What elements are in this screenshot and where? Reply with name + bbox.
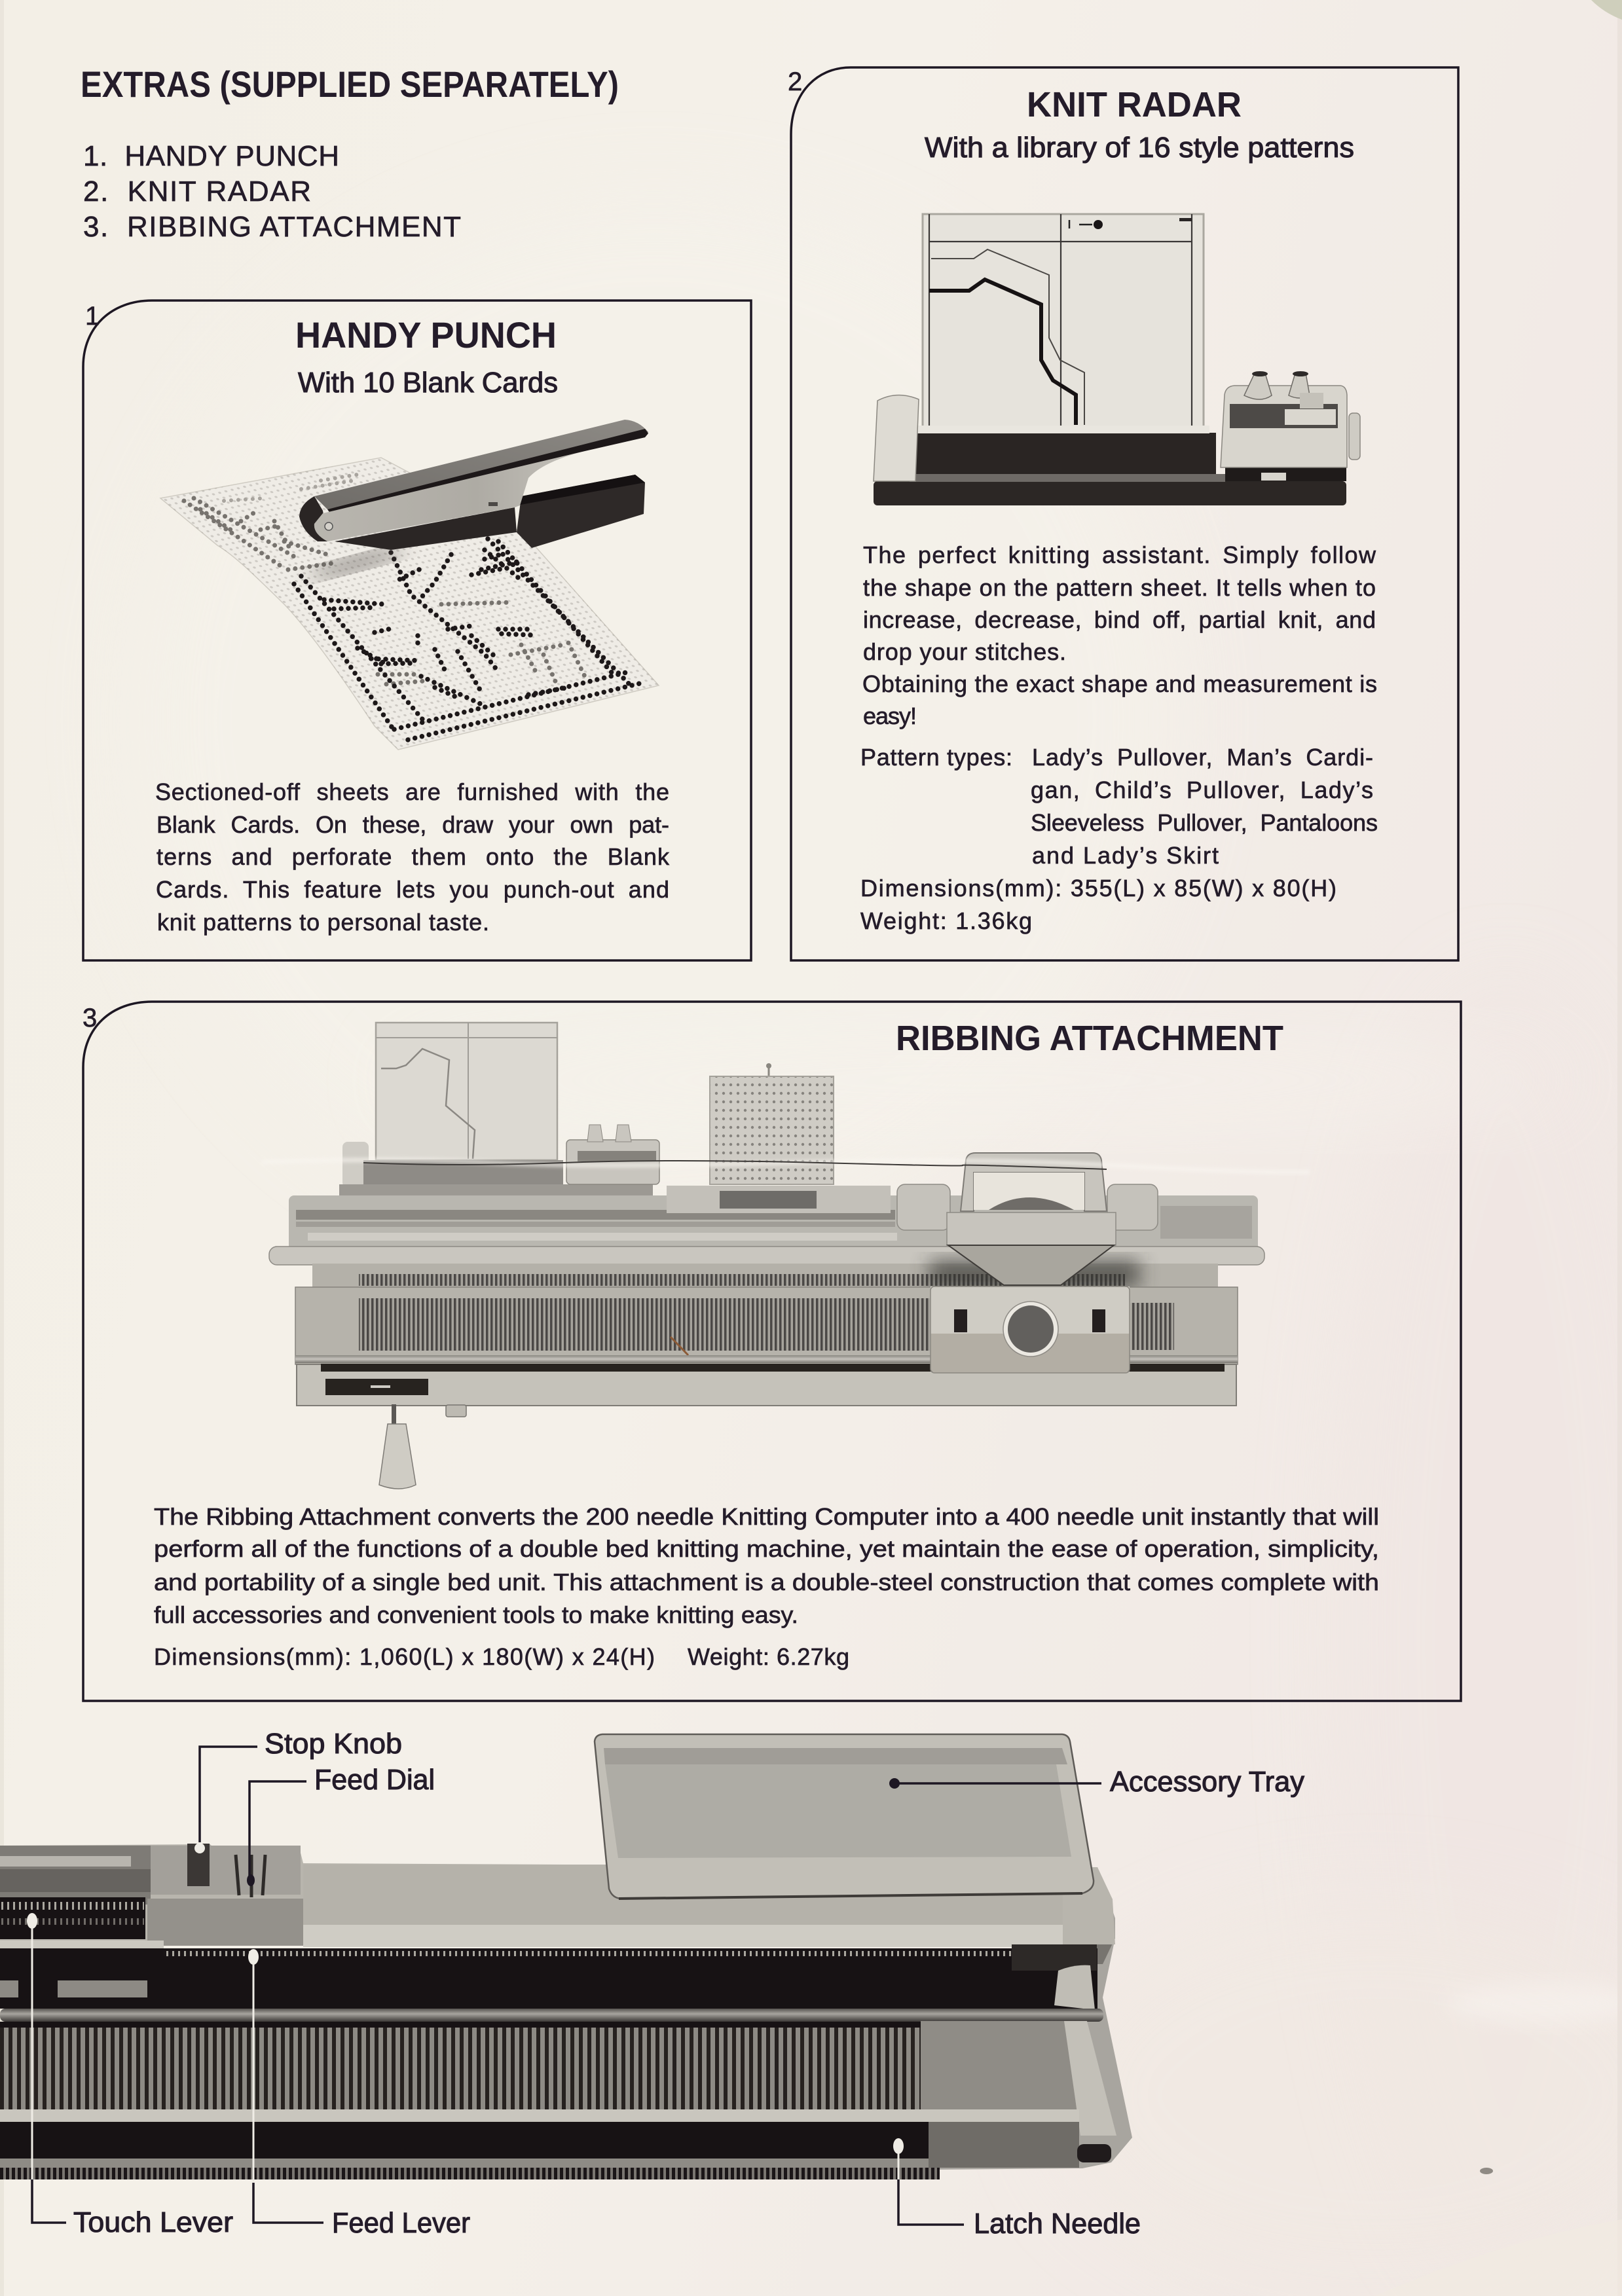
heading: knit radar: KNIT RADAR xyxy=(1027,85,1242,124)
description text: perform all of the functions of a double bed knitting machine, yet maintain the ease of operation, simplicity, xyxy=(154,1535,1379,1562)
illustration: punched card and hand punch xyxy=(151,420,668,759)
panel number 2: 2 xyxy=(788,67,802,96)
callout: latch needle: Latch Needle xyxy=(974,2208,1141,2240)
description text xyxy=(862,541,1377,729)
callout: accessory tray: Accessory Tray xyxy=(1110,1766,1304,1798)
description text: and portability of a single bed unit. This attachment is a double-steel construction that comes complete with xyxy=(154,1569,1379,1595)
pattern types: gan, Child’s Pullover, Lady’s xyxy=(1031,776,1373,803)
panel: ribbing attachment xyxy=(83,1002,1461,1701)
pattern types: Lady’s Pullover, Man’s Cardi- xyxy=(1032,744,1373,771)
specifications: Weight: 6.27kg xyxy=(688,1643,849,1670)
callout: accessory tray xyxy=(889,1766,1304,1798)
pattern types: and Lady’s Skirt xyxy=(1032,842,1219,869)
callout: feed lever: Feed Lever xyxy=(332,2207,470,2239)
callout: touch lever xyxy=(27,1913,233,2238)
pattern types: Sleeveless Pullover, Pantaloons xyxy=(1031,809,1378,836)
contents list xyxy=(83,140,461,243)
description text: The perfect knitting assistant. Simply follow xyxy=(863,541,1376,568)
callout: feed lever xyxy=(248,1949,470,2239)
description text: drop your stitches. xyxy=(863,638,1066,665)
contents list: 1. HANDY PUNCH xyxy=(83,140,339,172)
illustration: knitting machine close-up xyxy=(0,1734,1132,2179)
callout: feed dial: Feed Dial xyxy=(314,1764,435,1796)
subheading: style library: With a library of 16 style patterns xyxy=(925,132,1354,164)
panel number 3: 3 xyxy=(83,1004,97,1032)
body text: terns and perforate them onto the Blank xyxy=(157,843,670,870)
heading: ribbing attachment: RIBBING ATTACHMENT xyxy=(896,1019,1283,1058)
description text: full accessories and convenient tools to make knitting easy. xyxy=(154,1601,798,1628)
subheading: blank cards: With 10 Blank Cards xyxy=(298,367,558,399)
panel: knit radar xyxy=(788,67,1458,960)
specifications: Weight: 1.36kg xyxy=(860,907,1032,934)
body text: Cards. This feature lets you punch-out and xyxy=(156,876,669,903)
specifications: Dimensions(mm): 1,060(L) x 180(W) x 24(H) xyxy=(154,1643,655,1670)
callout: stop knob xyxy=(194,1728,402,1853)
illustration: knit radar device xyxy=(874,214,1360,505)
description text xyxy=(154,1503,1379,1628)
specifications: Dimensions(mm): 355(L) x 85(W) x 80(H) xyxy=(860,875,1336,902)
contents list: 2. KNIT RADAR xyxy=(83,175,311,208)
body text xyxy=(155,778,670,936)
description text: increase, decrease, bind off, partial knit, and xyxy=(863,606,1376,633)
description text: the shape on the pattern sheet. It tells when to xyxy=(863,574,1376,601)
pattern types: Pattern types: xyxy=(860,744,1012,771)
callout: feed dial xyxy=(247,1764,435,1886)
description text: Obtaining the exact shape and measurement is xyxy=(862,670,1377,697)
pattern types xyxy=(860,744,1378,869)
heading: handy punch: HANDY PUNCH xyxy=(295,314,557,355)
body text: knit patterns to personal taste. xyxy=(157,909,489,936)
illustration: knitting machine with ribber xyxy=(269,1023,1264,1489)
panel number 1: 1 xyxy=(85,302,100,331)
callout: touch lever: Touch Lever xyxy=(73,2206,233,2238)
callout: stop knob: Stop Knob xyxy=(265,1728,402,1760)
description text: The Ribbing Attachment converts the 200 needle Knitting Computer into a 400 needle unit instantly that will xyxy=(154,1503,1379,1530)
specifications xyxy=(860,875,1336,934)
description text: easy! xyxy=(863,702,917,729)
contents list: 3. RIBBING ATTACHMENT xyxy=(83,211,461,243)
crease line over the machine xyxy=(363,1161,1107,1169)
body text: Blank Cards. On these, draw your own pat- xyxy=(157,811,669,838)
body text: Sectioned-off sheets are furnished with the xyxy=(155,778,669,805)
panel: handy punch xyxy=(83,301,751,960)
callout: latch needle xyxy=(893,2138,1141,2240)
main title: EXTRAS (SUPPLIED SEPARATELY) xyxy=(81,64,619,105)
crease in the paper xyxy=(262,1160,1310,1172)
